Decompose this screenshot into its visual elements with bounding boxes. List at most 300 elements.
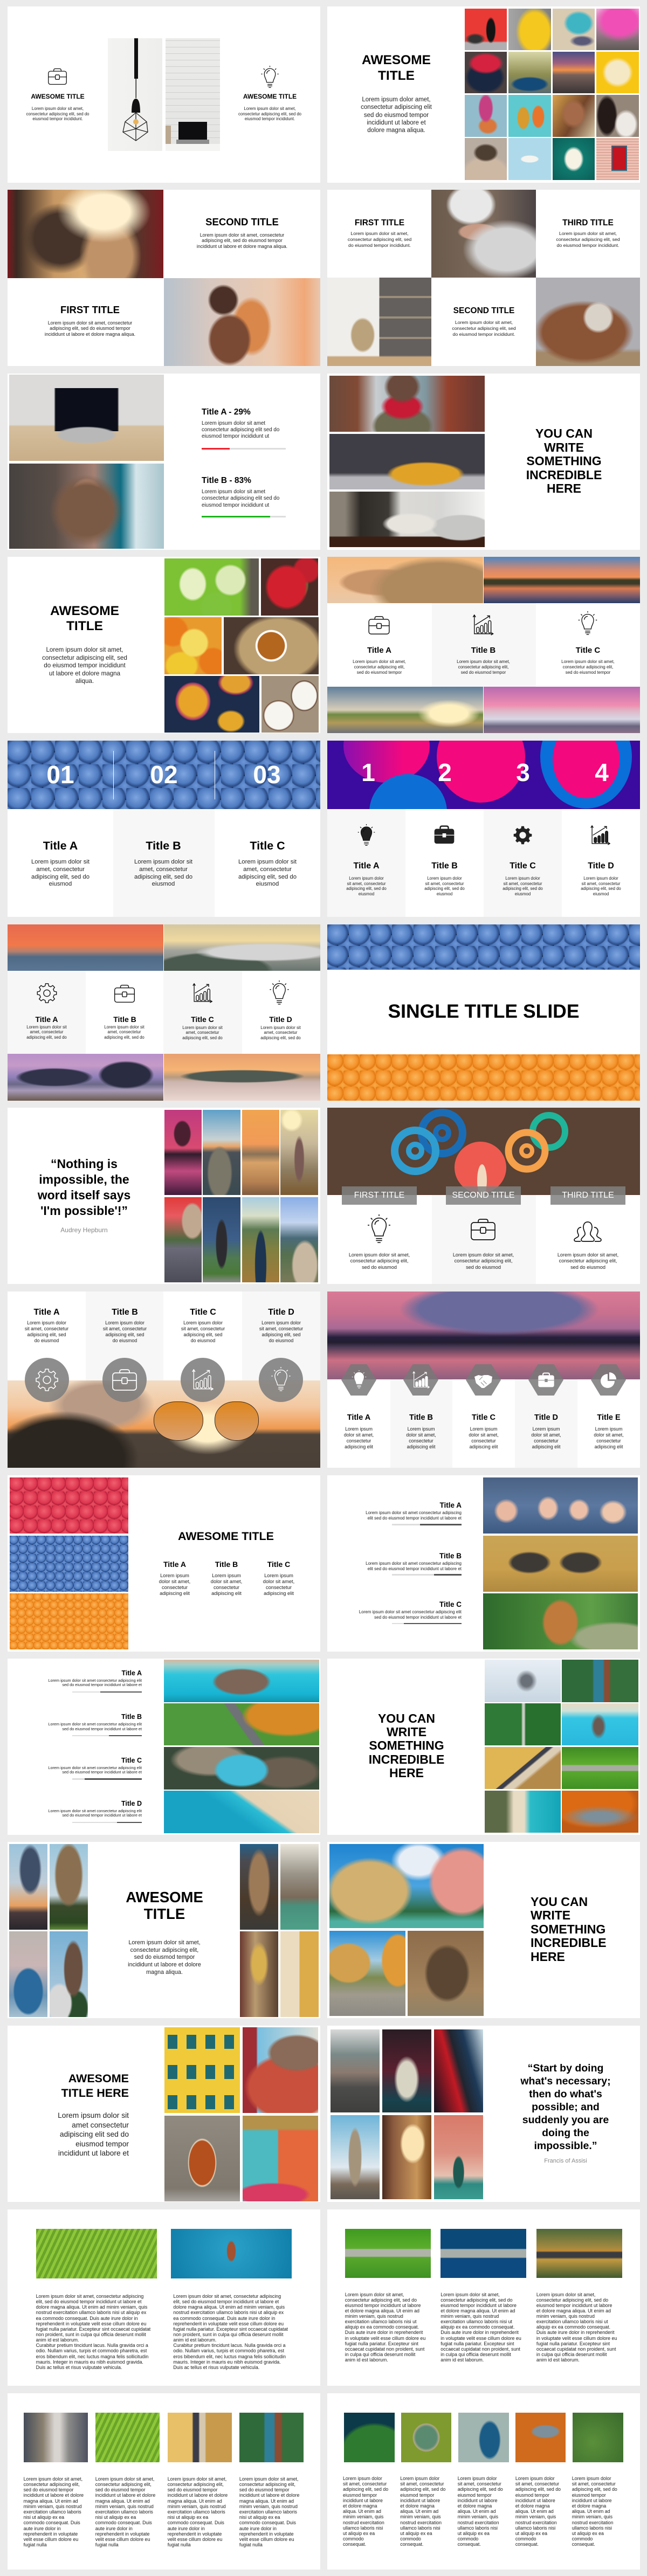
quote: word itself says — [38, 1188, 130, 1202]
text: column D: Lorem ipsum — [533, 1426, 560, 1432]
text: column C: adipiscing elit — [470, 1444, 498, 1449]
text: column A: consectetur — [162, 1585, 188, 1590]
number 01: 01 — [46, 761, 74, 789]
text column 1: et dolore magna — [343, 2503, 377, 2509]
heading — [61, 2071, 129, 2100]
text: column B: Lorem ipsum dolor — [427, 876, 462, 881]
photo: green apples — [164, 558, 259, 616]
text: column A: adipiscing elit, sed do — [31, 874, 90, 880]
label box: first title — [342, 1186, 417, 1205]
text: title B: eiusmod tempor incididunt ut — [202, 502, 269, 508]
text: column B: Lorem ipsum dolor sit — [104, 1025, 144, 1030]
text column right: anim id est laborum. — [173, 2337, 216, 2343]
text: column D: eiusmod — [593, 892, 609, 896]
text: column A: consectetur adipiscing elit, — [354, 665, 404, 669]
text column 5: adipiscing elit, sed do — [572, 2487, 617, 2492]
text: column A: sit amet, consectetur — [25, 1326, 68, 1331]
text column 5: et dolore magna — [572, 2503, 606, 2509]
text: column C: Lorem ipsum — [470, 1426, 497, 1432]
text column left: non proident, sunt in culpa qui officia deserunt mollit — [36, 2332, 146, 2337]
slide 27: four photos with long text — [8, 2393, 320, 2570]
photo: hanging lamp — [108, 38, 162, 151]
icon: solid chart — [590, 825, 610, 845]
icon badge: gear — [25, 1358, 69, 1402]
photo: blueberries — [10, 1536, 128, 1592]
photo: pink sunset over lake — [327, 1292, 640, 1379]
text: left: Lorem ipsum dolor sit amet, — [32, 106, 84, 111]
text column 2: anim id est laborum. — [440, 2357, 484, 2363]
photo: glass towers — [50, 1844, 88, 1930]
text column 3: Lorem ipsum dolor — [458, 2476, 497, 2481]
text column 5: sit amet, consectetur — [572, 2481, 616, 2487]
photo: red house and tiled roof — [243, 2027, 318, 2113]
text: column A: Lorem ipsum — [345, 1426, 373, 1432]
text: title C — [359, 1610, 462, 1620]
text column 2: consectetur adipiscing elit, sed do — [440, 2297, 512, 2303]
text column 3: eiusmod tempor incididunt ut labore — [536, 2303, 612, 2308]
photo: tree at pink dusk — [164, 1110, 202, 1195]
text column 1: sed do eiusmod tempor — [24, 2487, 73, 2492]
photo: citrus fruits — [164, 617, 222, 674]
photo: wheat fields and highway — [484, 1747, 561, 1789]
photo: purple dusk with trees — [8, 1054, 163, 1101]
text: title B: Lorem ipsum dolor sit amet — [202, 489, 265, 495]
text: column B: consectetur adipiscing elit, — [458, 665, 508, 669]
text column left: ea commodo consequat. Duis aute irure dolor in — [36, 2316, 138, 2321]
quote author: Francis of Assisi — [544, 2158, 587, 2164]
photo: beach with palms — [484, 1791, 561, 1833]
statement heading: HERE — [547, 481, 581, 495]
text: column A — [8, 1320, 86, 1344]
text column 5: incididunt ut labore — [572, 2498, 612, 2503]
text: column B: adipiscing elit, sed — [106, 1332, 144, 1337]
slide 13: quote with eight landscape strips — [8, 1108, 320, 1284]
text: column A: adipiscing elit — [160, 1591, 190, 1596]
photo: lighthouse and pier — [203, 1110, 240, 1195]
photo: blue pond in forest — [164, 1747, 319, 1790]
text: magna aliqua. — [146, 1969, 183, 1976]
text column 2: eiusmod tempor incididunt ut labore — [440, 2303, 517, 2308]
photo: pink candy fluff — [596, 9, 639, 50]
icon: briefcase — [48, 68, 67, 85]
statement heading: INCREDIBLE — [531, 1936, 607, 1950]
text column 2: aliquip ex ea commodo consequat. — [440, 2324, 514, 2330]
photo: orange wall with flowers and wheel — [243, 2116, 318, 2201]
statement heading: WRITE — [387, 1725, 426, 1739]
text: column C: sit amet, consectetur — [181, 1326, 225, 1331]
text column 3: nisi ut aliquip ex ea — [168, 2515, 208, 2520]
text column 5: ut aliquip ex ea — [572, 2531, 604, 2536]
text column 3: nostrud exercitation — [458, 2520, 499, 2525]
quote: suddenly you are — [522, 2114, 609, 2126]
text column 3: consectetur adipiscing elit, — [168, 2482, 224, 2487]
text: column B: sit amet, consectetur — [425, 881, 464, 886]
heading: title A: Title A - 29% — [202, 408, 251, 417]
text column 4: consequat. — [515, 2542, 539, 2547]
text: column D: amet, consectetur — [264, 1030, 297, 1035]
photo: orange forest and river — [515, 2413, 566, 2462]
text column left: fugiat nulla pariatur. Excepteur sint occaecat cupidatat — [36, 2326, 150, 2332]
heading: title B: Title B — [113, 1015, 136, 1024]
text column 5: Lorem ipsum dolor — [572, 2476, 611, 2481]
text: column A — [346, 876, 387, 896]
text column left: nostrud exercitation ullamco laboris nisi ut aliquip ex — [36, 2310, 146, 2315]
quote: “Nothing is — [51, 1157, 118, 1171]
text: right: Lorem ipsum dolor sit amet, — [244, 106, 296, 111]
column: middle grey — [113, 809, 215, 917]
photo: raspberries — [10, 1477, 128, 1534]
text column 1: anim id est laborum. — [345, 2357, 388, 2363]
text: column 3 — [536, 1252, 640, 1271]
photo: boat in blue water — [171, 2229, 292, 2278]
text: column C — [561, 659, 615, 675]
heading: AWESOME — [126, 1889, 203, 1905]
text — [361, 96, 432, 134]
text column 3: et dolore magna — [458, 2503, 492, 2509]
text — [58, 2111, 129, 2158]
text column 2: velit esse cillum dolore eu — [95, 2537, 150, 2542]
text: column B: dolor sit amet, — [406, 1432, 436, 1437]
text: title B — [202, 489, 279, 508]
bar: title C — [392, 1622, 462, 1624]
slide 22: Italian town photos with statement — [327, 1842, 640, 2018]
text column 5: minim veniam, quis — [572, 2514, 612, 2519]
photo: circular clearing in forest — [401, 2413, 451, 2462]
text column 2: exercitation ullamco laboris nisi ut — [440, 2319, 512, 2324]
photo: road through green forest — [562, 1660, 638, 1702]
text column 1: minim veniam, quis nostrud — [345, 2313, 403, 2319]
text column 2: et dolore magna aliqua. Ut enim ad — [440, 2308, 515, 2313]
text column 2: nisi ut aliquip ex ea — [95, 2515, 136, 2520]
text: column B: Lorem ipsum dolor sit amet, — [457, 659, 510, 664]
label box: second title: SECOND TITLE — [452, 1191, 515, 1200]
photo: coconuts — [261, 676, 319, 733]
text column 3: ut aliquip ex ea — [458, 2531, 490, 2536]
text: consectetur adipiscing elit, sed — [42, 654, 127, 661]
text: title B: consectetur adipiscing elit sed do — [202, 495, 279, 501]
quote — [19, 1156, 149, 1218]
text: title A — [366, 1510, 462, 1521]
text: column D — [242, 1320, 320, 1344]
slide 5: progress titles with two photos — [8, 374, 320, 550]
text: column B: Lorem ipsum dolor sit — [134, 859, 192, 865]
text column 3: commodo consequat. Duis — [168, 2520, 224, 2525]
photo: woman at red wall — [465, 9, 507, 50]
icon: briefcase — [470, 1218, 496, 1241]
photo: brown leather sofa — [536, 278, 640, 366]
text: column A: Lorem ipsum dolor sit amet, — [353, 659, 406, 664]
photo: road through forest — [242, 1197, 279, 1282]
text column 2: Lorem ipsum dolor sit amet, — [440, 2292, 500, 2297]
text: sed do eiusmod tempor — [134, 1954, 195, 1960]
text: dolore magna aliqua. — [367, 127, 425, 134]
photo: taxi — [508, 52, 551, 93]
slide 26: three photos with long text — [327, 2209, 640, 2386]
text column 1: aliquip ex ea commodo consequat. — [345, 2324, 419, 2330]
text: column B: Lorem ipsum — [212, 1573, 241, 1578]
icon: briefcase — [114, 985, 135, 1003]
text: column 2 — [431, 1252, 535, 1271]
text column right: nostrud exercitation ullamco laboris nisi ut aliquip ex — [173, 2310, 284, 2315]
text: third: Lorem ipsum dolor sit amet, — [559, 231, 617, 236]
text column 5: consequat. — [572, 2542, 595, 2547]
text column 3: sed do eiusmod tempor — [168, 2487, 217, 2492]
text: second title: adipiscing elit, sed do eiusmod tempor — [202, 238, 283, 243]
icon badge: briefcase — [102, 1358, 147, 1402]
heading: first: FIRST TITLE — [355, 218, 404, 227]
text: column B — [457, 659, 510, 675]
text column 4: sit amet, consectetur — [515, 2481, 559, 2487]
text: first: Lorem ipsum dolor sit amet, — [350, 231, 409, 236]
photo: yellow car — [508, 9, 551, 50]
heading: title D: Title D — [121, 1800, 142, 1807]
photo: snowy roundabout — [484, 1660, 561, 1702]
text column 4: velit esse cillum dolore eu — [239, 2537, 294, 2542]
icon: bulb — [270, 980, 289, 1005]
heading: title B: Title B — [439, 1552, 462, 1560]
text column 2: minim veniam, quis nostrud — [440, 2313, 499, 2319]
photo: flatiron building — [331, 2115, 380, 2199]
text column 1: reprehenderit in voluptate — [24, 2531, 78, 2537]
text column right: elit, sed do eiusmod tempor incididunt ut labore et — [173, 2299, 279, 2304]
text: title B — [366, 1561, 462, 1572]
text column 4: Lorem ipsum dolor — [515, 2476, 555, 2481]
number 2: 2 — [438, 758, 452, 786]
heading: title E: Title E — [597, 1413, 621, 1422]
text: column A: eiusmod — [359, 892, 374, 896]
text column 1: consequat. — [343, 2542, 366, 2547]
text column 3: et dolore magna aliqua. Ut enim ad — [536, 2308, 611, 2313]
heading: title B: Title B - 83% — [202, 475, 251, 485]
photo: cobbled alley at dusk — [240, 1844, 278, 1930]
text: column A: Lorem ipsum — [160, 1573, 189, 1578]
text column right: Curabitur pretium tincidunt lacus. Nulla gravida orci a — [173, 2343, 286, 2348]
statement heading — [531, 1895, 607, 1964]
text column 4: aliqua. Ut enim ad — [515, 2509, 554, 2514]
text column 5 — [572, 2476, 617, 2547]
text column right: fugiat nulla pariatur. Excepteur sint occaecat cupidatat — [173, 2326, 288, 2332]
icon badge: bulb — [259, 1358, 303, 1402]
text: column C: Lorem ipsum dolor sit amet, — [561, 659, 615, 664]
text: incididunt ut labore et dolore — [128, 1962, 201, 1968]
text: column C: eiusmod — [515, 892, 531, 896]
photo: upside down girl — [465, 95, 507, 137]
photo: yes tiles on light blue — [508, 138, 551, 180]
heading: title B: Title B — [409, 1413, 433, 1422]
text: column C: adipiscing elit — [264, 1591, 294, 1596]
slide 15: four columns with circles over sunglasses — [8, 1292, 320, 1468]
text column 4: magna aliqua. Ut enim ad — [239, 2498, 294, 2503]
text: right: consectetur adipiscing elit, sed do — [238, 112, 301, 116]
text column 4: commodo consequat. Duis — [239, 2520, 296, 2525]
text: second: Lorem ipsum dolor sit amet, — [455, 320, 513, 325]
text: column A: adipiscing elit, sed do — [26, 1035, 67, 1040]
photo: orange lentils — [10, 1593, 128, 1649]
text: Lorem ipsum dolor sit — [58, 2111, 129, 2119]
text column right: reprehenderit in voluptate velit esse cillum dolore eu — [173, 2321, 284, 2326]
text column 2 — [95, 2476, 155, 2547]
photo: surfer on beach — [242, 1110, 279, 1195]
text: second — [452, 320, 516, 337]
text: second: consectetur adipiscing elit, sed — [452, 326, 516, 331]
text: sed do eiusmod tempor — [364, 112, 429, 119]
text column 4: minim veniam, quis nostrud — [239, 2504, 298, 2509]
text column 4: et dolore magna — [515, 2503, 549, 2509]
photo: green fields — [95, 2413, 160, 2462]
text column 1: in culpa qui officia deserunt mollit — [345, 2352, 415, 2357]
photo: girl with camera in van — [553, 95, 595, 137]
text: column A: Lorem ipsum dolor — [27, 1320, 66, 1325]
text: column C: adipiscing elit, sed — [184, 1332, 222, 1337]
text: column D: adipiscing elit, sed do — [260, 1035, 301, 1040]
heading: TITLE HERE — [61, 2087, 129, 2100]
text column right: non proident, sunt in culpa qui officia deserunt mollit — [173, 2332, 283, 2337]
text: title A — [48, 1679, 142, 1687]
slide 10: colourful blobs with four icon columns — [327, 741, 640, 917]
heading: title B: Title B — [215, 1560, 238, 1569]
photo: road with pink car — [239, 2413, 304, 2462]
text: amet consectetur — [72, 2121, 129, 2129]
divider 1 — [113, 751, 114, 799]
text: column A: adipiscing elit, sed do — [346, 886, 387, 891]
text column 3: exercitation ullamco laboris nisi ut — [536, 2319, 608, 2324]
text: Lorem ipsum dolor sit amet, — [46, 646, 123, 653]
text: column B — [199, 1573, 253, 1597]
text: first — [348, 231, 411, 248]
icon: gear — [37, 983, 57, 1003]
text: title B: Lorem ipsum dolor sit amet consectetur adipiscing elit — [48, 1722, 142, 1726]
column: grey 3 — [484, 809, 562, 917]
heading: title A: Title A — [347, 1413, 370, 1422]
text: column C: consectetur — [266, 1585, 292, 1590]
text column 1: in voluptate velit esse cillum dolore eu — [345, 2336, 425, 2341]
text: column C: Lorem ipsum — [264, 1573, 293, 1578]
text column 1: sit amet, consectetur — [343, 2481, 387, 2487]
text: title A: sed do eiusmod tempor incididunt ut labore et — [62, 1682, 142, 1687]
heading: title C: Title C — [121, 1757, 142, 1764]
text: first title — [45, 320, 135, 337]
text: left: eiusmod tempor incididunt. — [32, 116, 83, 121]
text column left: Duis ac tellus et risus vulputate vehicula. — [36, 2365, 122, 2370]
photo: red window on pink wall — [596, 138, 639, 180]
text: column 1: consectetur adipiscing elit, — [350, 1258, 408, 1263]
text: Lorem ipsum dolor sit amet, — [128, 1939, 201, 1946]
photo: forest by dark lake — [344, 2413, 395, 2462]
text: column B: consectetur — [214, 1585, 239, 1590]
photo: loft bedroom — [329, 492, 485, 547]
text column 3: minim veniam, quis nostrud — [168, 2504, 226, 2509]
text column 3: aliqua. Ut enim ad — [458, 2509, 496, 2514]
text column 1: et dolore magna aliqua. Ut enim ad — [345, 2308, 419, 2313]
text: column C — [252, 1573, 306, 1597]
text: column B: eiusmod — [437, 892, 452, 896]
slide 6: city photos and statement — [327, 374, 640, 550]
heading: title A: Title A — [163, 1560, 186, 1569]
text column 4: consectetur adipiscing elit, — [239, 2482, 295, 2487]
text column 3: incididunt ut labore et dolore — [168, 2492, 228, 2498]
slide 24: city strips with quote — [327, 2026, 640, 2202]
heading: AWESOME TITLE — [178, 1530, 274, 1543]
text column 1: ut aliquip ex ea — [343, 2531, 375, 2536]
heading: title C: Title C — [267, 1560, 290, 1569]
text: title A: Lorem ipsum dolor sit amet consectetur adipiscing — [366, 1510, 462, 1515]
text column 3: fugiat nulla pariatur. Excepteur sint — [536, 2341, 610, 2346]
text column 1: Lorem ipsum dolor sit amet, — [345, 2292, 404, 2297]
hexagon: briefcase — [528, 1364, 563, 1396]
text: column D: do eiusmod — [269, 1338, 293, 1343]
photo: couple with sunglasses — [596, 95, 639, 137]
photo: foggy hills at dawn — [164, 924, 320, 971]
text column 3 — [458, 2476, 503, 2547]
slide 18: wildlife photos with right aligned titles — [327, 1475, 640, 1652]
icon badge: chart — [181, 1358, 225, 1402]
photo: fox in green forest — [483, 1593, 638, 1649]
text: column B: amet, consectetur — [108, 1030, 141, 1034]
heading: second: SECOND TITLE — [453, 306, 514, 315]
text: column 3: consectetur adipiscing elit, — [559, 1258, 617, 1263]
text column 5: commodo — [572, 2536, 593, 2542]
photo: bridge over deep blue water — [440, 2229, 526, 2278]
text column 4 — [515, 2476, 561, 2547]
photo: friends in jeep — [8, 190, 163, 278]
number 03: 03 — [253, 761, 281, 789]
column: grey 1 — [327, 809, 405, 917]
heading: title C: Title C — [439, 1600, 462, 1608]
heading: title D: Title D — [534, 1413, 558, 1422]
slide 4: three titles with three photos — [327, 190, 640, 366]
text: column D: adipiscing elit, sed do — [581, 886, 621, 891]
quote: what's necessary; — [520, 2075, 611, 2087]
text column 2: ullamco laboris nisi — [400, 2525, 440, 2531]
text: incididunt ut labore et — [367, 120, 426, 126]
text: column C: Lorem ipsum dolor sit — [182, 1025, 223, 1030]
text column 3: in culpa qui officia deserunt mollit — [536, 2352, 607, 2357]
photo: boats in turquoise water — [562, 1703, 638, 1745]
statement heading: WRITE — [544, 440, 584, 454]
slide 25: two photos with long text — [8, 2209, 320, 2386]
text: consectetur adipiscing elit, — [130, 1947, 198, 1953]
text: column D: Lorem ipsum dolor — [261, 1320, 301, 1325]
text column right: ea commodo consequat. Duis aute irure dolor in — [173, 2316, 275, 2321]
bar: title C — [72, 1778, 142, 1780]
text: title A: consectetur adipiscing elit sed do — [202, 427, 279, 433]
text: title B: elit sed do eiusmod tempor incididunt ut labore et — [368, 1566, 462, 1571]
text: column A: sed do eiusmod tempor — [357, 670, 402, 675]
text column 4: commodo — [515, 2536, 536, 2542]
photo: stone archway — [408, 1931, 484, 2016]
text: column B: sed do eiusmod tempor — [461, 670, 506, 675]
photo: winding river and houses — [458, 2413, 509, 2462]
text: column B: adipiscing elit, sed do — [424, 886, 465, 891]
text column 4: aute irure dolor in — [239, 2526, 277, 2531]
text: consectetur adipiscing elit — [361, 104, 432, 111]
slide 17: fruit strips with three columns — [8, 1475, 320, 1652]
text column left: mauris. Integer in mauris eu nibh euismod gravida. — [36, 2359, 143, 2365]
text column 2: sed do eiusmod tempor — [95, 2487, 146, 2492]
text column 1: eiusmod tempor incididunt ut labore — [345, 2303, 421, 2308]
text column 3: Duis aute irure dolor in reprehenderit — [536, 2330, 614, 2335]
statement heading: HERE — [531, 1950, 565, 1964]
text column 2 — [400, 2476, 445, 2547]
photo: paved street — [329, 1931, 405, 2016]
quote: then do what's — [529, 2088, 602, 2100]
text: title C: Lorem ipsum dolor sit amet consectetur adipiscing elit — [359, 1610, 462, 1614]
text: column C: Lorem ipsum dolor — [505, 876, 540, 881]
text: column A: sit amet, consectetur — [347, 881, 386, 886]
photo: Shanghai tower at dusk — [9, 1931, 47, 2017]
text column 3: aute irure dolor in — [168, 2526, 205, 2531]
text: title D — [48, 1809, 142, 1818]
